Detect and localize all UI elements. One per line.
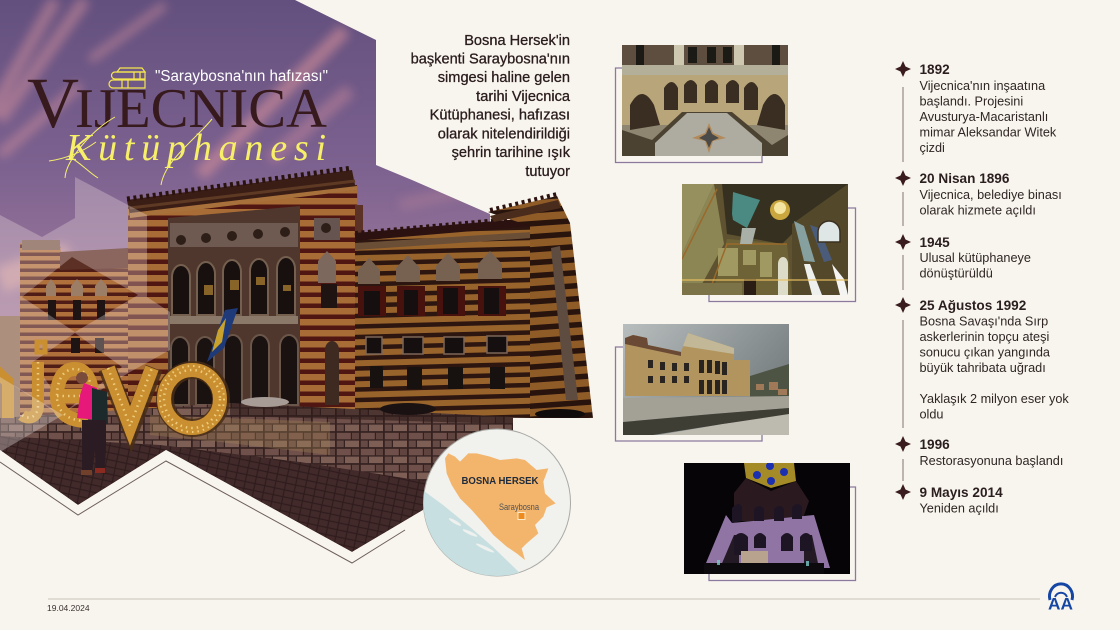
AA logo [1048,584,1073,614]
entry 1996: 1996 [920,437,950,452]
photo 4: concert in the hall [684,463,850,574]
date: 19.04.2024 [47,603,90,613]
pale facet over sign [0,377,63,452]
far left building [0,316,20,421]
intro text: başkenti Saraybosna'nın [411,52,570,68]
photo 2: decorated hall [682,184,848,295]
photo 4 frame [709,487,856,580]
title: Kütüphanesi [49,117,326,185]
entry 1992: Yaklaşık 2 milyon eser yok [920,392,1069,406]
intro text: simgesi haline gelen [438,70,570,86]
entry 1945: Ulusal kütüphaneye [920,251,1031,265]
cars [241,397,289,407]
entry 2014: Yeniden açıldı [920,502,999,516]
title: Vijecnica: IJECNICA [75,78,328,140]
photo 2 frame [709,208,856,302]
intro text: şehrin tarihine ışık [452,145,571,161]
entry 1996: Restorasyonuna başlandı [920,454,1063,468]
intro text: Kütüphanesi, hafızası [430,108,570,124]
entry 1945: 1945 [920,235,950,250]
intro text [411,33,571,180]
capital label: Saraybosna [499,502,540,513]
timeline [895,61,1069,516]
timeline markers [895,61,911,500]
title: Vijecnica: V [27,63,79,143]
entry 1945 [920,235,1031,280]
central block [127,168,360,410]
title: Vijecnica [27,63,328,143]
right tower [488,194,593,418]
footer line [48,598,1040,600]
wing windows [358,251,502,284]
ground and stone wall [0,397,585,552]
intro text: tutuyor [525,164,570,180]
sky [0,0,490,417]
photo 1: atrium [622,45,788,156]
flag [207,308,238,362]
frieze [170,218,340,247]
right pilaster details [318,251,336,283]
hero photo: Vijecnica building [0,0,600,552]
entry 1996 [920,437,1063,468]
entry 2014 [920,485,1003,516]
entry 1992 [920,298,1069,422]
intro text: olarak nitelendirildiği [438,126,570,142]
left wing [20,240,130,415]
entry 1896 [920,171,1062,218]
entry 1896: olarak hizmete açıldı [920,204,1036,218]
photo 1 frame [616,68,762,162]
entry 1892: Vijecnica'nın inşaatına [920,79,1046,93]
lower arches [171,335,298,405]
entry 1945: dönüştürüldü [920,266,993,280]
AA logo: AA [1048,594,1073,614]
entry 1992: oldu [920,408,944,422]
capital marker [518,512,525,520]
entry 1896: Vijecnica, belediye binası [920,188,1062,202]
entry 1892: çizdi [920,141,945,155]
illuminated sign [0,342,224,432]
entry 1892: 1892 [920,62,950,77]
crenellated cornice [127,170,356,216]
right wing [355,205,532,418]
title: Kütüphanesi: Kütüphanesi [65,127,326,169]
entry 1896: 20 Nisan 1896 [920,171,1010,186]
entry 1892: başlandı. Projesini [920,94,1023,108]
country shape [445,453,556,560]
connector lines [902,87,904,481]
entry 1892: mimar Aleksandar Witek [920,126,1057,140]
entry 1992: 25 Ağustos 1992 [920,298,1027,313]
photo 3: building exterior [623,324,789,435]
entry 1992: sonucu çıkan yangında [920,346,1051,360]
subtitle: "Saraybosna'nın hafızası" [155,68,328,85]
zigzag outline [0,461,405,563]
country label: BOSNA HERSEK [462,475,539,487]
map circle: Bosna Hersek [420,429,570,580]
upper arches [172,257,295,315]
photo 3 frame [616,347,762,441]
entry 1892: Avusturya-Macaristanlı [920,110,1048,124]
woman in pink jacket [76,372,108,475]
entry 1992: Bosna Savaşı'nda Sırp [920,314,1048,328]
pale translucent facets [0,177,170,415]
icon: stack of books [109,68,145,88]
entry 1992: askerlerinin topçu ateşi [920,330,1049,344]
entry 1992: büyük tahribata uğradı [920,361,1046,375]
entry 2014: 9 Mayıs 2014 [920,485,1003,500]
entry 1892 [920,62,1057,155]
intro text: tarihi Vijecnica [476,89,571,105]
intro text: Bosna Hersek'in [464,33,570,49]
